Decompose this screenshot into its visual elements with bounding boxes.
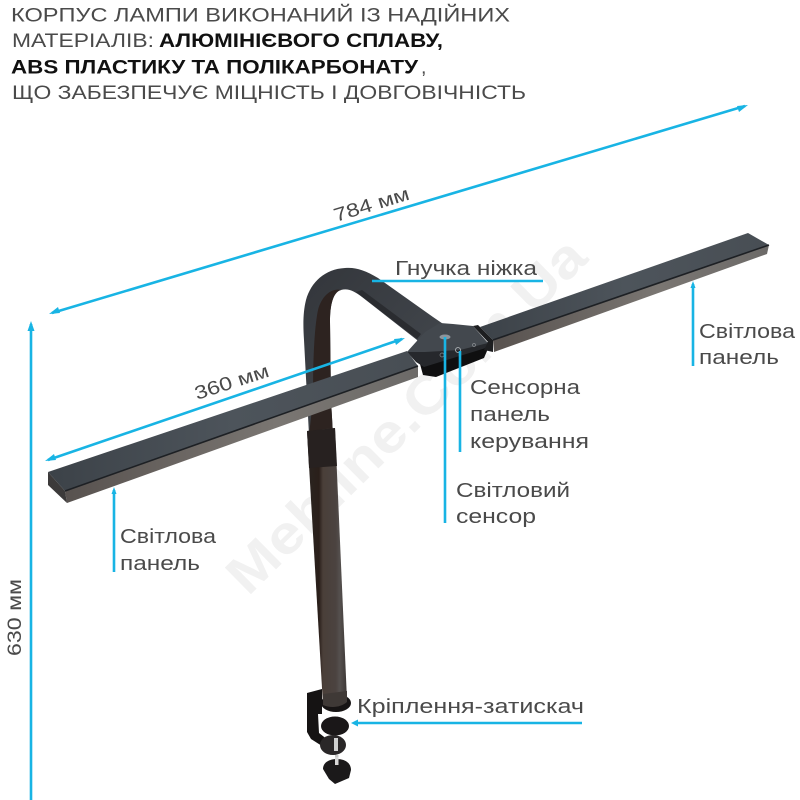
watermark: Mebline.Com.Ua (214, 225, 599, 606)
control hub (407, 323, 493, 377)
heading text block: ЩО ЗАБЕЗПЕЧУЄ МІЦНІСТЬ І ДОВГОВІЧНІСТЬ (12, 82, 526, 104)
lamp illustration (48, 233, 769, 784)
dimension: 630 mm: 630 мм (5, 579, 26, 656)
dimension: 784 mm: 784 мм (331, 184, 412, 227)
heading text block: ABS ПЛАСТИКУ ТА ПОЛІКАРБОНАТУ (11, 56, 419, 78)
label: touch control panel: панель (470, 404, 550, 426)
label: clamp (351, 696, 584, 726)
label: right light panel: панель (699, 347, 779, 369)
label: left light panel: Світлова (120, 526, 217, 548)
label: light sensor: Світловий (456, 480, 570, 502)
label: left light panel (112, 487, 217, 575)
label: touch control panel (460, 351, 589, 453)
heading text block: АЛЮМІНІЄВОГО СПЛАВУ, (159, 30, 443, 52)
label: touch control panel: Сенсорна (470, 377, 581, 399)
heading text block (11, 2, 526, 104)
label: clamp: Кріплення-затискач (357, 696, 584, 718)
label: light sensor: сенсор (456, 506, 536, 528)
dimension: 360 mm: 360 мм (192, 361, 272, 405)
left light panel (48, 351, 418, 503)
dimension: 360 mm (45, 338, 405, 461)
label: flexible leg: Гнучка ніжка (395, 258, 538, 280)
heading text block: КОРПУС ЛАМПИ ВИКОНАНИЙ ІЗ НАДІЙНИХ (11, 2, 510, 26)
label: right light panel (690, 281, 796, 369)
right light panel (480, 233, 769, 352)
lamp pole lower (307, 428, 347, 705)
flexible arm (303, 268, 452, 435)
heading text block: , (421, 56, 426, 78)
arm inner shade (309, 290, 341, 435)
label: left light panel: панель (120, 553, 200, 575)
label: light sensor (445, 337, 570, 528)
clamp (307, 689, 351, 784)
label: touch control panel: керування (470, 431, 589, 453)
heading text block: МАТЕРІАЛІВ: (12, 30, 154, 52)
dimension: 630 mm (5, 321, 34, 800)
arm lower shadow (356, 290, 421, 339)
dimension: 784 mm (49, 105, 748, 314)
label: right light panel: Світлова (699, 321, 796, 343)
